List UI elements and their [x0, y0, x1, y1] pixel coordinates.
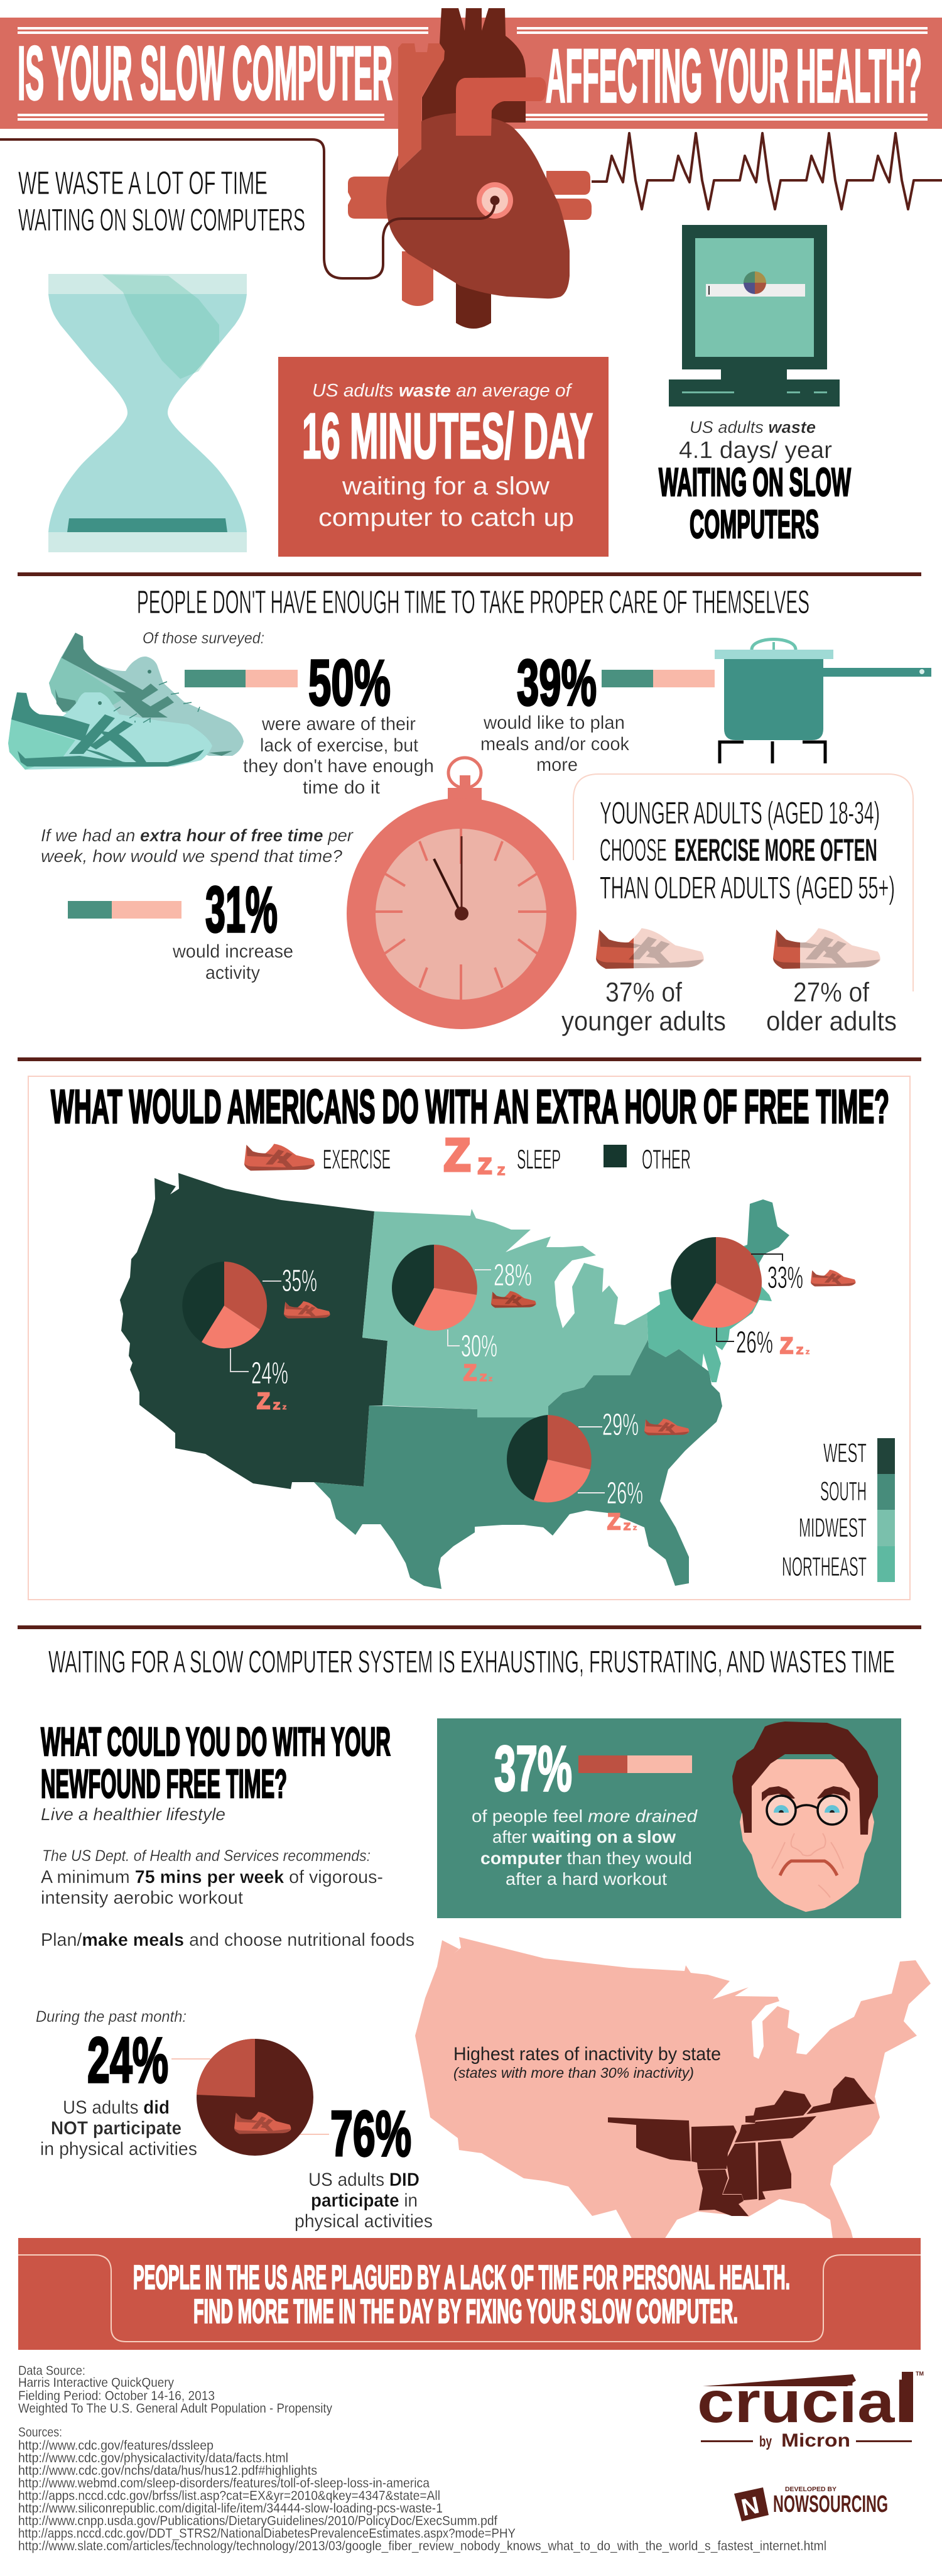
- callout: west values: Z: [283, 1405, 286, 1411]
- panel: more drained: 37%: [494, 1733, 572, 1804]
- logo: nowsourcing: [734, 2486, 888, 2521]
- text: inactivity caption: Highest rates of inactivity by state: [453, 2044, 721, 2065]
- callout: south values: Z: [607, 1509, 620, 1534]
- text block: data sources: http://www.slate.com/articles/technology/technology/2013/03/google_fiber_review_nobody_knows_what_to_do_with_the_world_s_fastest_internet.html: [18, 2539, 826, 2553]
- callout: northeast values: Z: [780, 1333, 793, 1358]
- text: 4.1 days per year: COMPUTERS: [690, 503, 819, 547]
- wire from header to heart: [0, 139, 495, 278]
- stat: 39 percent: would like to plan: [483, 712, 625, 733]
- icon: hourglass: [48, 274, 247, 552]
- legend: activities: OTHER: [642, 1144, 691, 1175]
- legend: activities: Z: [478, 1154, 492, 1179]
- text: extra hour question: [41, 826, 354, 866]
- callout: west values: Z: [257, 1388, 270, 1414]
- stat: 31 percent: activity: [205, 963, 260, 983]
- icon: anatomical heart: [348, 8, 592, 329]
- callout: midwest values: Z: [480, 1373, 487, 1384]
- stat: 31 percent: [68, 873, 293, 983]
- callout: south values: 26%: [607, 1476, 643, 1510]
- pie: south: [507, 1415, 592, 1502]
- callout: west values: Z: [273, 1401, 280, 1412]
- panel: 16 minutes per day: waiting for a slow: [342, 472, 550, 500]
- text block: data sources: Weighted To The U.S. General Adult Population - Propensity: [18, 2401, 332, 2416]
- callout: midwest values: 28%: [494, 1258, 532, 1292]
- callout: northeast values: Z: [796, 1346, 803, 1356]
- callout: midwest values: Z: [489, 1377, 492, 1382]
- panel: 16 minutes per day: US adults waste an average of: [312, 381, 573, 401]
- pie: physical activity participation: US adults did: [63, 2097, 170, 2118]
- icon: heart target: [477, 182, 513, 219]
- pie: physical activity participation: in physical activities: [40, 2139, 197, 2159]
- region: maine and new england: [735, 1199, 789, 1269]
- panel: more drained: after waiting on a slow: [492, 1827, 676, 1847]
- text block: healthier lifestyle: Plan/make meals and choose nutritional foods: [41, 1930, 414, 1950]
- stat: 31 percent: would increase: [172, 941, 293, 962]
- text block: data sources: http://www.webmd.com/sleep-disorders/features/toll-of-sleep-loss-in-america: [18, 2476, 430, 2491]
- panel: younger vs older adults: 27% of: [793, 977, 870, 1008]
- panel: younger vs older adults: older adults: [766, 1006, 897, 1037]
- icon: teal running shoes: [8, 633, 244, 770]
- panel: more drained: after a hard workout: [506, 1869, 667, 1889]
- stat: 50 percent: [143, 630, 434, 798]
- heading: what could you do: [41, 1719, 391, 1806]
- region: midwest: [362, 1209, 648, 1417]
- callout: west values: [230, 1264, 330, 1414]
- text block: healthier lifestyle: [41, 1804, 414, 1950]
- text block: data sources: http://apps.nccd.cdc.gov/DDT_STRS2/NationalDiabetesPrevalenceEstimates.aspx?mode=PHY: [18, 2526, 516, 2541]
- callout: midwest values: Z: [463, 1360, 477, 1385]
- panel: 16 minutes per day: [278, 357, 609, 557]
- text block: data sources: http://www.cdc.gov/features/dssleep: [18, 2438, 214, 2453]
- panel: younger vs older adults: younger adults: [561, 1006, 726, 1037]
- legend: regions: SOUTH: [820, 1476, 867, 1507]
- icon: older shoe 27 percent: [773, 928, 880, 969]
- pie: physical activity participation: During the past month:: [36, 2008, 187, 2026]
- callout: south values: [578, 1408, 689, 1534]
- logo: crucial by micron: crucial: [697, 2369, 913, 2435]
- callout: south values: Z: [633, 1525, 637, 1531]
- text block: data sources: [18, 2364, 826, 2553]
- text block: data sources: http://www.siliconrepublic.com/digital-life/item/34444-slow-loading-pcs-waste-1: [18, 2501, 443, 2516]
- header banner: [0, 18, 942, 129]
- text: 4.1 days per year: US adults waste: [690, 418, 816, 437]
- panel: younger vs older adults: 37% of: [605, 977, 683, 1008]
- text: 4.1 days per year: 4.1 days/ year: [679, 437, 832, 464]
- legend: activities: Z: [444, 1130, 470, 1181]
- icon: cooking pot: [715, 640, 931, 763]
- stat: 39 percent: more: [536, 755, 578, 775]
- stat: 50 percent: lack of exercise, but: [260, 735, 419, 756]
- pie: physical activity participation: [36, 2008, 433, 2232]
- logo: crucial by micron: TM: [916, 2371, 924, 2377]
- logo: nowsourcing: DEVELOPED BY: [785, 2486, 836, 2493]
- callout: northeast values: 26%: [736, 1326, 773, 1360]
- panel: 16 minutes per day: computer to catch up: [318, 504, 574, 532]
- callout: south values: 29%: [602, 1408, 639, 1442]
- pie: physical activity participation: NOT participate: [51, 2118, 181, 2139]
- stat: 50 percent: Of those surveyed:: [143, 630, 264, 647]
- legend: activities: Z: [497, 1165, 505, 1177]
- text block: data sources: http://www.cdc.gov/nchs/data/hus/hus12.pdf#highlights: [18, 2464, 317, 2478]
- pie: physical activity participation: 76%: [330, 2098, 411, 2169]
- legend: activities: SLEEP: [517, 1144, 561, 1175]
- stat: 50 percent: time do it: [303, 777, 381, 798]
- callout: midwest values: [448, 1258, 536, 1385]
- pie: physical activity participation: 24%: [87, 2024, 168, 2096]
- subheading: we waste a lot of time: [18, 165, 305, 237]
- subheading: we waste a lot of time: WE WASTE A LOT OF TIME: [18, 165, 268, 202]
- text block: data sources: http://apps.nccd.cdc.gov/brfss/list.asp?cat=EX&yr=2010&qkey=4347&state=All: [18, 2489, 440, 2503]
- panel: younger vs older adults: [561, 774, 913, 1037]
- stat: 39 percent: 39%: [517, 647, 597, 719]
- text: extra hour question: If we had an extra hour of free time per: [41, 826, 354, 845]
- pie: midwest: [392, 1245, 477, 1331]
- map: US regions: [120, 1173, 789, 1589]
- region: west: [120, 1173, 387, 1489]
- panel: more drained: [437, 1718, 901, 1918]
- text: 4.1 days per year: [659, 418, 851, 547]
- callout: midwest values: 30%: [461, 1329, 497, 1363]
- heartbeat line: [592, 133, 942, 209]
- legend: regions: WEST: [823, 1438, 867, 1468]
- panel: younger vs older adults: CHOOSE: [600, 832, 667, 868]
- map: inactivity by state: [415, 1937, 931, 2243]
- icon: frustrated face: [732, 1722, 878, 1912]
- panel: more drained: computer than they would: [480, 1848, 692, 1868]
- subheading: we waste a lot of time: WAITING ON SLOW COMPUTERS: [18, 202, 305, 237]
- text block: healthier lifestyle: Live a healthier lifestyle: [41, 1804, 225, 1824]
- callout: south values: Z: [624, 1522, 631, 1532]
- states with high inactivity: [608, 2077, 875, 2216]
- stat: 50 percent: were aware of their: [261, 714, 416, 734]
- panel: 16 minutes per day: 16 MINUTES/ DAY: [302, 400, 593, 472]
- stat: 39 percent: meals and/or cook: [480, 734, 630, 755]
- callout: west values: 24%: [251, 1356, 288, 1390]
- callout: west values: 35%: [282, 1264, 317, 1298]
- legend: regions: [782, 1438, 895, 1582]
- logo: crucial by micron: [697, 2369, 924, 2451]
- text block: healthier lifestyle: intensity aerobic workout: [41, 1888, 243, 1908]
- legend: regions: MIDWEST: [799, 1513, 867, 1543]
- icon: computer with spinner: [669, 225, 840, 407]
- pie: physical activity participation: US adults DID: [308, 2169, 420, 2190]
- stat: 50 percent: 50%: [308, 647, 391, 719]
- text block: data sources: Fielding Period: October 14-16, 2013: [18, 2389, 215, 2403]
- legend: activities: EXERCISE: [323, 1144, 391, 1175]
- callout: northeast values: 33%: [767, 1261, 803, 1295]
- logo: nowsourcing: N: [739, 2492, 762, 2521]
- pie: physical activity participation: physical activities: [295, 2211, 433, 2232]
- panel: closing banner: [18, 2238, 921, 2350]
- callout: northeast values: Z: [806, 1350, 809, 1355]
- icon: younger shoe 37 percent: [596, 928, 704, 969]
- text block: data sources: Harris Interactive QuickQuery: [18, 2376, 174, 2390]
- text block: data sources: Data Source:: [18, 2364, 85, 2378]
- logo: crucial by micron: Micron: [781, 2430, 850, 2451]
- panel: more drained: of people feel more drained: [472, 1806, 698, 1826]
- panel frame: extra hour map: [28, 1076, 910, 1600]
- text block: healthier lifestyle: The US Dept. of Health and Services recommends:: [42, 1847, 371, 1865]
- stat: 31 percent: 31%: [205, 873, 278, 946]
- pie: physical activity participation: participate in: [311, 2190, 418, 2211]
- legend: activities: [244, 1130, 691, 1181]
- logo: crucial by micron: by: [759, 2433, 772, 2450]
- pie: northeast: [671, 1237, 762, 1328]
- text block: data sources: Sources:: [18, 2425, 62, 2440]
- stat: 50 percent: they don't have enough: [243, 756, 434, 777]
- text block: healthier lifestyle: A minimum 75 mins per week of vigorous-: [41, 1867, 383, 1887]
- heading: what could you do: NEWFOUND FREE TIME?: [41, 1761, 287, 1806]
- callout: northeast values: [717, 1254, 855, 1360]
- text: inactivity caption: [453, 2044, 721, 2081]
- region: northeast: [647, 1245, 772, 1382]
- text block: data sources: http://www.cnpp.usda.gov/Publications/DietaryGuidelines/2010/PolicyDoc/ExecSumm.pdf: [18, 2514, 497, 2528]
- heading: what could you do: WHAT COULD YOU DO WITH YOUR: [41, 1719, 391, 1764]
- text block: data sources: http://www.cdc.gov/physicalactivity/data/facts.html: [18, 2451, 288, 2465]
- pie: west: [182, 1262, 267, 1348]
- region: south: [314, 1340, 722, 1589]
- stat: 39 percent: [480, 647, 715, 775]
- icon: stopwatch: [347, 758, 577, 1029]
- text: extra hour question: week, how would we spend that time?: [41, 846, 342, 866]
- text: inactivity caption: (states with more than 30% inactivity): [453, 2065, 694, 2081]
